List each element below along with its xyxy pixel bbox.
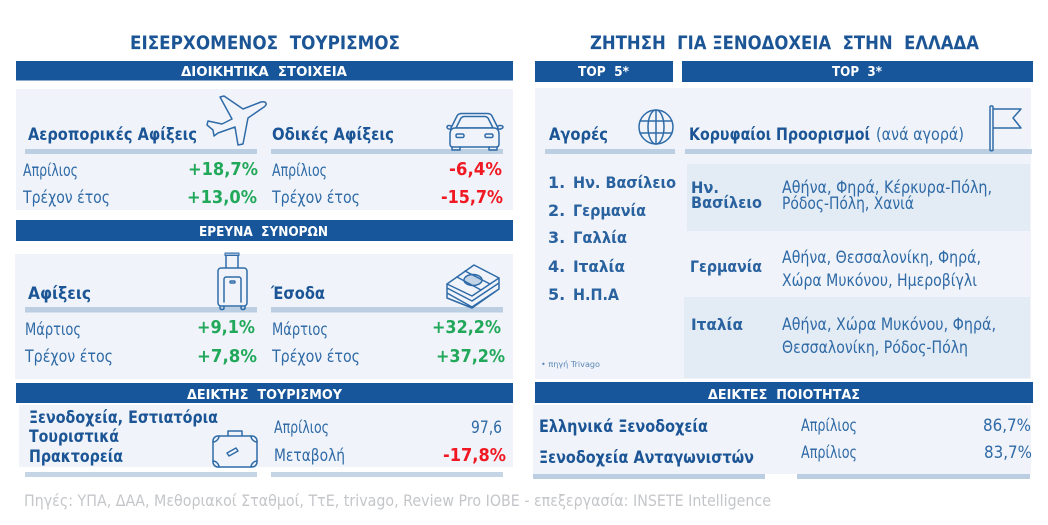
hotels, restaurants, travel agencies heading: Πρακτορεία (29, 447, 123, 466)
panel: border survey: +32,2% (432, 318, 501, 338)
air arrivals figures: Απρίλιος (23, 161, 78, 180)
markets heading: Αγορές (549, 125, 608, 144)
panel: administrative data: Τρέχον έτος (22, 188, 110, 207)
destinations: germany: Αθήνα, Θεσσαλονίκη, Φηρά, (782, 248, 981, 267)
banner: tourism index: ΔΕΙΚΤΗΣ ΤΟΥΡΙΣΜΟΥ (187, 388, 343, 403)
arrivals heading: Αφίξεις (28, 284, 91, 303)
right title: ΖΗΤΗΣΗ ΓΙΑ ΞΕΝΟΔΟΧΕΙΑ ΣΤΗΝ ΕΛΛΑΔΑ (590, 32, 979, 54)
destinations: united kingdom: Ρόδος-Πόλη, Χανιά (782, 194, 914, 213)
banner: administrative data: ΔΙΟΙΚΗΤΙΚΑ ΣΤΟΙΧΕΙΑ (181, 65, 347, 80)
panel: quality indices (533, 405, 1032, 479)
source: trivago: • πηγή Trivago (541, 360, 600, 369)
destinations: italy: Ιταλία (691, 315, 743, 334)
top 5 markets list: Η.Π.Α (573, 285, 620, 304)
panel: border survey: Τρέχον έτος (271, 347, 360, 366)
road arrivals figures: Απρίλιος (272, 161, 327, 180)
icon: globe (639, 110, 673, 144)
competitor hotels row: 83,7% (984, 443, 1032, 462)
destinations: united kingdom: Αθήνα, Φηρά, Κέρκυρα-Πόλη, (782, 178, 992, 197)
icon: flag (990, 106, 1021, 151)
road arrivals heading: Οδικές Αφίξεις (272, 125, 394, 144)
destinations: united kingdom: Ην. (691, 178, 719, 197)
panel: border survey (15, 253, 513, 379)
destinations: italy: Θεσσαλονίκη, Ρόδος-Πόλη (782, 338, 968, 357)
banner: tourism index (16, 383, 513, 403)
banner: quality indices: ΔΕΙΚΤΕΣ ΠΟΙΟΤΗΤΑΣ (708, 388, 860, 403)
panel: border survey: Τρέχον έτος (24, 347, 113, 366)
destinations heading: (ανά αγορά) (876, 125, 964, 144)
banner: administrative data (16, 61, 513, 80)
destinations: italy: Αθήνα, Χώρα Μυκόνου, Φηρά, (782, 315, 996, 334)
revenue heading: Έσοδα (270, 284, 325, 303)
destinations: italy (691, 315, 996, 357)
panel: administrative data: -15,7% (441, 188, 503, 208)
panel: administrative data: +13,0% (187, 188, 257, 208)
banner: border survey (16, 220, 513, 241)
icon: car (447, 114, 503, 150)
top 5 markets list: Γαλλία (573, 228, 627, 247)
icon: briefcase (213, 431, 257, 467)
left title: ΕΙΣΕΡΧΟΜΕΝΟΣ ΤΟΥΡΙΣΜΟΣ (130, 32, 400, 54)
top 5 markets list: Ην. Βασίλειο (573, 173, 676, 192)
hotels, restaurants, travel agencies heading: Ξενοδοχεία, Εστιατόρια (29, 408, 218, 427)
panel: markets and destinations (535, 88, 1032, 379)
top 5 markets list: 2. (548, 201, 565, 220)
tourism index figures: Απρίλιος (274, 418, 329, 437)
top 5 markets list: 4. (548, 257, 565, 276)
destinations: germany (690, 248, 981, 290)
destinations: united kingdom: Βασίλειο (691, 193, 762, 212)
panel: tourism index: -17,8% (443, 446, 506, 466)
icon: stack of money (447, 265, 499, 308)
banner: top 5 (535, 61, 673, 82)
destinations: germany: Γερμανία (690, 257, 762, 276)
banner: top 5: TOP 5* (578, 65, 629, 80)
panel: tourism index: 97,6 (471, 418, 502, 437)
destinations heading: Κορυφαίοι Προορισμοί (689, 125, 870, 144)
icon: airplane (207, 96, 266, 145)
air arrivals heading: Αεροπορικές Αφίξεις (28, 125, 197, 144)
source note: Πηγές: ΥΠΑ, ΔΑΑ, Μεθοριακοί Σταθμοί, ΤτΕ, trivago, Review Pro ΙΟΒΕ - επεξεργασία: INSETE Intelligence (24, 491, 771, 510)
top 5 markets list: 3. (548, 228, 565, 247)
revenue figures: Μάρτιος (272, 320, 328, 339)
arrivals figures: Μάρτιος (25, 320, 81, 339)
panel: administrative data: +18,7% (188, 160, 258, 180)
panel: border survey: +7,8% (197, 347, 257, 367)
competitor hotels row: Απρίλιος (801, 443, 857, 462)
destinations: united kingdom (691, 178, 992, 213)
panel: administrative data: Τρέχον έτος (271, 188, 360, 207)
panel: tourism index (19, 405, 513, 477)
hotels, restaurants, travel agencies heading: Τουριστικά (29, 427, 119, 446)
greek hotels row (539, 416, 1031, 436)
greek hotels row: Απρίλιος (801, 416, 857, 435)
icon: suitcase (218, 253, 247, 310)
banner: border survey: ΕΡΕΥΝΑ ΣΥΝΟΡΩΝ (199, 225, 328, 240)
top 5 markets list: 5. (548, 285, 565, 304)
top 5 markets list (548, 173, 676, 304)
banner: top 3 (682, 61, 1033, 82)
panel: administrative data: -6,4% (449, 160, 502, 180)
hotels, restaurants, travel agencies heading (29, 408, 218, 466)
greek hotels row: Ελληνικά Ξενοδοχεία (539, 417, 708, 436)
panel: administrative data (16, 89, 513, 210)
panel: border survey: +37,2% (436, 347, 505, 367)
top 5 markets list: 1. (548, 173, 565, 192)
greek hotels row: 86,7% (983, 416, 1031, 435)
top 5 markets list: Γερμανία (573, 201, 646, 220)
destinations: germany: Χώρα Μυκόνου, Ημεροβίγλι (782, 271, 977, 290)
top 5 markets list: Ιταλία (573, 257, 625, 276)
banner: top 3: TOP 3* (832, 65, 882, 80)
competitor hotels row (539, 443, 1032, 467)
competitor hotels row: Ξενοδοχεία Ανταγωνιστών (539, 448, 754, 467)
panel: border survey: +9,1% (197, 318, 255, 338)
banner: quality indices (535, 382, 1033, 403)
panel: tourism index: Μεταβολή (274, 446, 345, 465)
